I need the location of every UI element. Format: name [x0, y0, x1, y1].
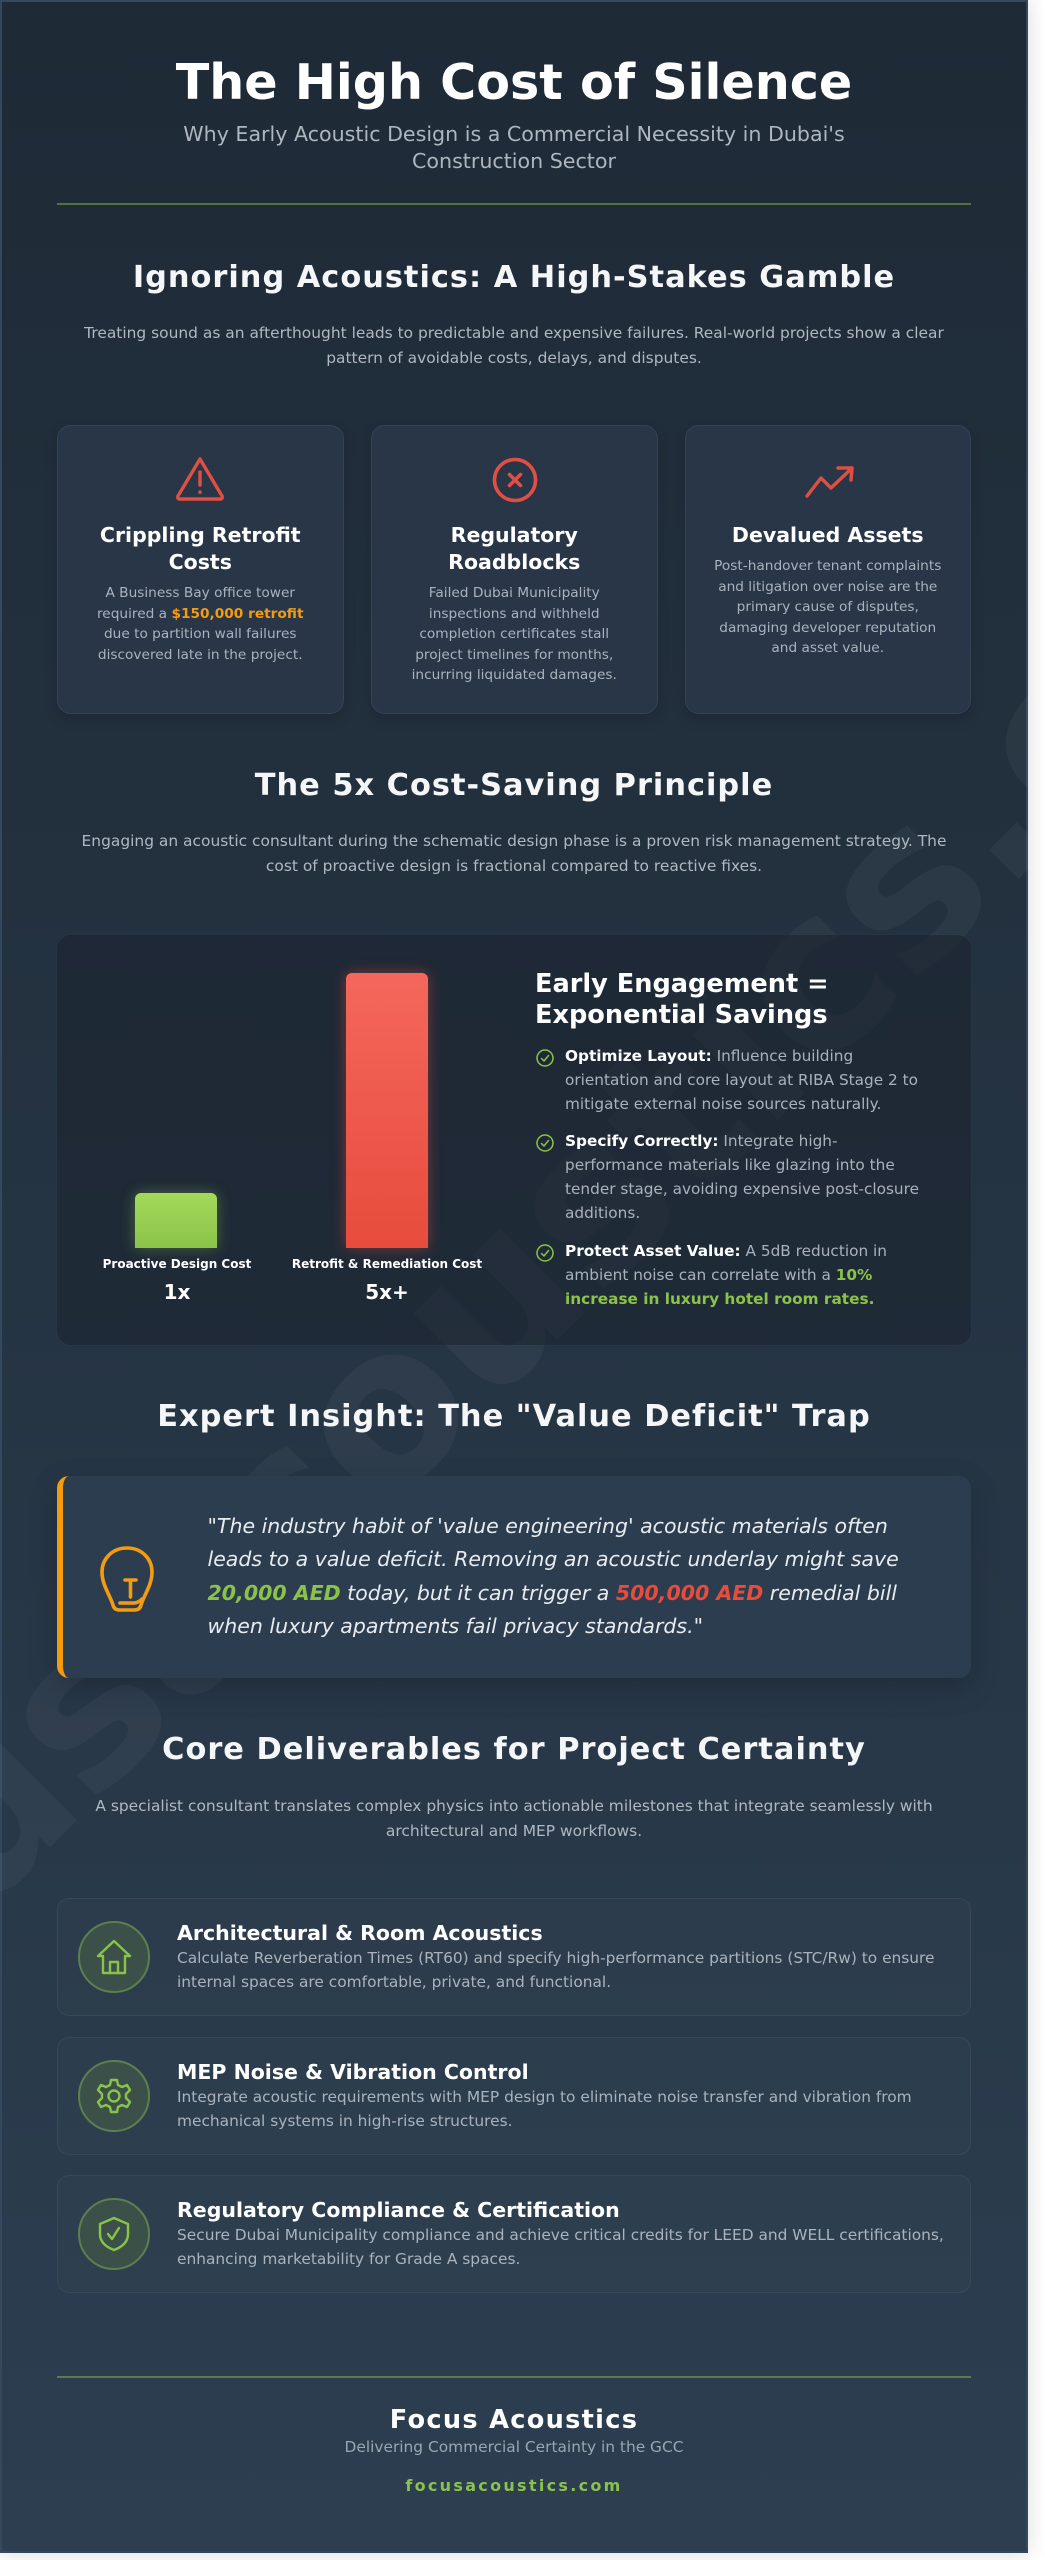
card text [412, 585, 617, 683]
panel: devalued [684, 425, 971, 714]
heading: 5x: The 5x Cost-Saving Principle [255, 768, 773, 803]
heading: deliverables: Core Deliverables for Project Certainty [162, 1732, 866, 1767]
item: specify: Specify Correctly: Integrate high- [565, 1132, 838, 1150]
panel: callout [57, 1476, 971, 1678]
chart heading: Early Engagement = [535, 969, 829, 999]
intro: gamble: pattern of avoidable costs, delays, and disputes. [326, 349, 702, 367]
chart heading [535, 969, 829, 1030]
label: retrofit: Retrofit & Remediation Cost [292, 1257, 482, 1271]
panel: regulatory [371, 425, 658, 714]
deliverable text: internal spaces are comfortable, private, and functional. [177, 1973, 611, 1991]
item: protect: increase in luxury hotel room rates. [565, 1290, 874, 1308]
deliverable text: mechanical systems in high-rise structures. [177, 2112, 513, 2130]
card text: A Business Bay office tower [105, 585, 295, 601]
deliverable text: Secure Dubai Municipality compliance and achieve critical credits for LEED and WELL certifications, [177, 2226, 944, 2244]
deliverable text [177, 2226, 944, 2268]
card text: inspections and withheld [429, 606, 600, 622]
panel: cost chart [57, 935, 971, 1345]
quote: leads to a value deficit. Removing an acoustic underlay might save [208, 1547, 899, 1571]
icon: warning [176, 457, 224, 501]
icon: check 3 [536, 1244, 554, 1262]
card title: Costs [169, 550, 232, 574]
card text: and litigation over noise are the [718, 579, 937, 595]
item: optimize: mitigate external noise sources naturally. [565, 1095, 881, 1113]
footer website: focusacoustics.com [405, 2476, 623, 2495]
intro: 5x [82, 832, 946, 875]
intro: deliverables [95, 1797, 933, 1840]
icon: lightbulb [100, 1546, 154, 1612]
card title [100, 523, 301, 574]
card text: and asset value. [771, 640, 884, 656]
bar: proactive [135, 1193, 217, 1248]
heading: insight: Expert Insight: The "Value Deficit" Trap [157, 1399, 871, 1434]
deliverable text [177, 2088, 912, 2130]
card text: completion certificates stall [419, 626, 609, 642]
icon: gear [78, 2060, 150, 2132]
card text: primary cause of disputes, [737, 599, 919, 615]
card text: required a $150,000 retrofit [97, 606, 304, 622]
intro: deliverables: A specialist consultant translates complex physics into actionable milestones that integrate seamlessly with [95, 1797, 933, 1815]
item: specify: tender stage, avoiding expensive post-closure [565, 1180, 919, 1198]
intro: deliverables: architectural and MEP workflows. [386, 1822, 642, 1840]
intro: gamble: Treating sound as an afterthought leads to predictable and expensive failures. Real-world projects show a clear [84, 324, 944, 342]
heading: gamble: Ignoring Acoustics: A High-Stakes Gamble [133, 260, 895, 295]
intro: 5x: Engaging an acoustic consultant during the schematic design phase is a proven risk management strategy. The [82, 832, 946, 850]
footer brand: Focus Acoustics [390, 2405, 638, 2435]
panel: regulatory compliance [57, 2175, 971, 2293]
card text: project timelines for months, [415, 647, 613, 663]
icon: trend [805, 466, 854, 498]
subtitle: Why Early Acoustic Design is a Commercial Necessity in Dubai's [183, 122, 845, 146]
item: protect: ambient noise can correlate with a 10% [565, 1266, 872, 1284]
item: optimize: Optimize Layout: Influence building [565, 1047, 853, 1065]
subtitle [183, 122, 845, 173]
icon: check 2 [536, 1134, 554, 1152]
card text: Post-handover tenant complaints [714, 558, 941, 574]
deliverable title: Regulatory Compliance & Certification [177, 2198, 620, 2222]
deliverable text: Calculate Reverberation Times (RT60) and specify high-performance partitions (STC/Rw) to ensure [177, 1949, 935, 1967]
label: proactive: Proactive Design Cost [103, 1257, 251, 1271]
item: specify: additions. [565, 1204, 640, 1222]
icon: shield [78, 2198, 150, 2270]
quote [208, 1514, 899, 1638]
icon: check 1 [536, 1049, 554, 1067]
card text: damaging developer reputation [719, 620, 936, 636]
deliverable text: enhancing marketability for Grade A spaces. [177, 2250, 520, 2268]
quote: when luxury apartments fail privacy standards." [208, 1614, 703, 1638]
value: 1x: 1x [164, 1280, 190, 1304]
card title: Devalued Assets [732, 523, 924, 547]
deliverable title: MEP Noise & Vibration Control [177, 2060, 529, 2084]
deliverable title: Architectural & Room Acoustics [177, 1920, 543, 1944]
card title: Regulatory [451, 523, 578, 547]
item: protect: Protect Asset Value: A 5dB reduction in [565, 1242, 887, 1260]
panel: MEP [57, 2037, 971, 2155]
chart heading: Exponential Savings [535, 1000, 828, 1030]
card text: Failed Dubai Municipality [429, 585, 600, 601]
card text: incurring liquidated damages. [412, 667, 617, 683]
value: 5x: 5x+ [365, 1280, 409, 1304]
panel: retrofit costs [57, 425, 344, 714]
title: The High Cost of Silence [176, 53, 852, 111]
intro: gamble [84, 324, 944, 367]
panel: architectural [57, 1898, 971, 2016]
quote: 20,000 AED today, but it can trigger a 500,000 AED remedial bill [208, 1581, 897, 1605]
card title: Roadblocks [448, 550, 580, 574]
intro: 5x: cost of proactive design is fractional compared to reactive fixes. [266, 857, 762, 875]
card text [97, 585, 304, 663]
card title [448, 523, 580, 574]
item: optimize: orientation and core layout at RIBA Stage 2 to [565, 1071, 918, 1089]
item: protect [565, 1242, 887, 1308]
card text: discovered late in the project. [98, 647, 303, 663]
footer tagline: Delivering Commercial Certainty in the GCC [344, 2438, 683, 2456]
deliverable text [177, 1949, 935, 1991]
card text [714, 558, 941, 656]
icon: house [78, 1921, 150, 1993]
item: optimize [565, 1047, 918, 1113]
item: specify [565, 1132, 919, 1222]
subtitle: Construction Sector [412, 149, 616, 173]
icon: circle x [492, 458, 538, 502]
card title: Crippling Retrofit [100, 523, 301, 547]
item: specify: performance materials like glazing into the [565, 1156, 895, 1174]
bar: retrofit [346, 973, 428, 1248]
deliverable text: Integrate acoustic requirements with MEP design to eliminate noise transfer and vibration from [177, 2088, 912, 2106]
card text: due to partition wall failures [104, 626, 297, 642]
quote: "The industry habit of 'value engineering' acoustic materials often [208, 1514, 888, 1538]
